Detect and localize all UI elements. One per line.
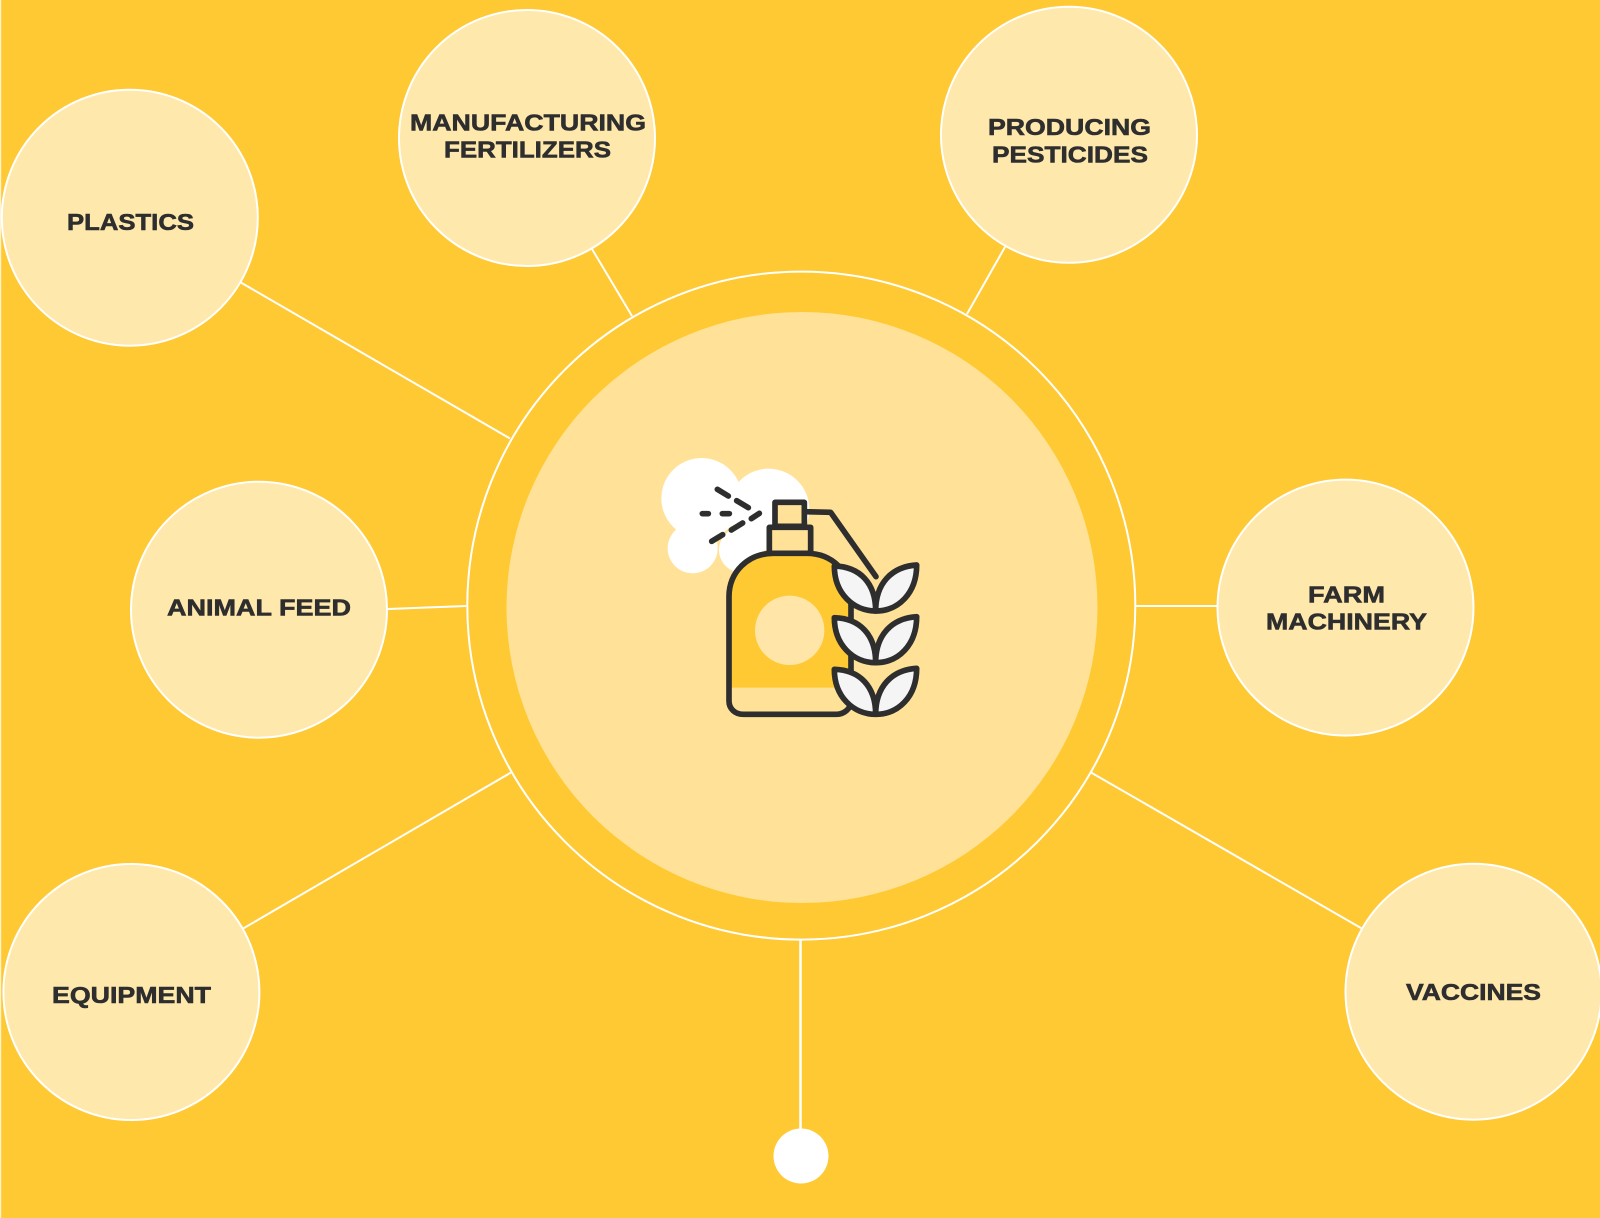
node: farm machinery: FARM	[1308, 582, 1385, 608]
node: plastics: PLASTICS	[67, 209, 194, 235]
inner disc	[506, 312, 1098, 903]
icon: spray bottle with plant	[661, 458, 917, 714]
node: plastics	[2, 90, 258, 346]
connector lines	[241, 247, 1362, 1130]
spray dashes	[702, 489, 759, 541]
node: manufacturing fertilizers: FERTILIZERS	[444, 137, 611, 163]
bottom node dot	[774, 1128, 828, 1184]
node: producing pesticides: PRODUCING	[988, 114, 1151, 140]
plant leaves	[834, 565, 917, 714]
node: farm machinery	[1218, 480, 1474, 736]
node: vaccines	[1346, 864, 1600, 1120]
bottle body	[729, 553, 851, 714]
node: farm machinery: MACHINERY	[1266, 608, 1427, 634]
node: animal feed	[131, 482, 387, 738]
node: equipment	[3, 864, 259, 1120]
node: equipment: EQUIPMENT	[52, 982, 211, 1008]
node: manufacturing fertilizers	[399, 10, 655, 266]
node: animal feed: ANIMAL FEED	[167, 594, 351, 620]
outer ring	[467, 272, 1135, 940]
node: manufacturing fertilizers: MANUFACTURING	[410, 109, 646, 135]
bottle nozzle	[769, 502, 876, 577]
node: vaccines: VACCINES	[1406, 979, 1541, 1005]
spray cloud	[661, 458, 809, 573]
node: producing pesticides	[941, 7, 1197, 263]
central hub	[467, 272, 1135, 940]
node: producing pesticides: PESTICIDES	[992, 142, 1148, 168]
